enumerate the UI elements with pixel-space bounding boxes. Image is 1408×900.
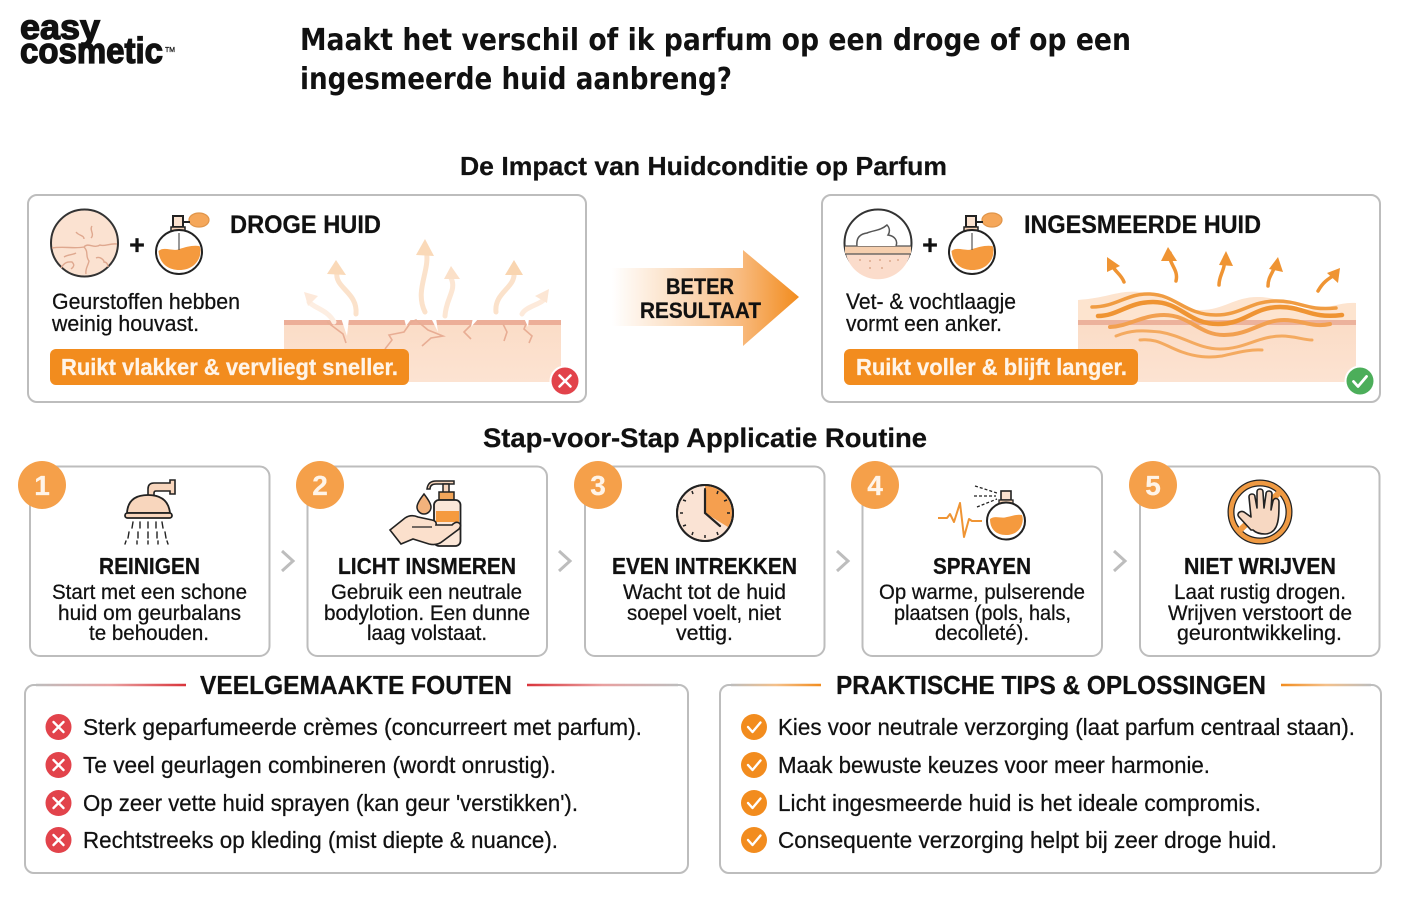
number badge: 2	[312, 470, 328, 501]
tip 1: Kies voor neutrale verzorging (laat parfum centraal staan).	[778, 714, 1355, 740]
logo: easy cosmetic	[20, 8, 175, 71]
logo: easy cosmetic: TM	[165, 47, 175, 54]
step text: plaatsen (pols, hals,	[894, 602, 1071, 625]
step text: huid om geurbalans	[58, 602, 241, 625]
chevron	[559, 551, 570, 571]
heading: impact: De Impact van Huidconditie op Parfum	[460, 151, 947, 181]
result pill: Ruikt vlakker & vervliegt sneller.	[61, 354, 398, 380]
panel: praktische tips	[720, 670, 1381, 873]
tip 2: Maak bewuste keuzes voor meer harmonie.	[778, 752, 1210, 778]
logo: easy cosmetic: cosmetic	[20, 30, 163, 71]
step text: laag volstaat.	[367, 622, 487, 645]
step text: Start met een schone	[52, 581, 247, 604]
step text: Wrijven verstoort de	[1168, 602, 1352, 625]
number badge: 3	[590, 470, 606, 501]
step text: Op warme, pulserende	[879, 581, 1085, 604]
panel heading: PRAKTISCHE TIPS & OPLOSSINGEN	[836, 670, 1266, 700]
arrow: beter resultaat	[612, 250, 799, 346]
logo: easy cosmetic: easy	[20, 8, 101, 47]
number badge: 5	[1145, 470, 1161, 501]
number badge	[296, 461, 344, 509]
step text	[1168, 581, 1352, 645]
chevron	[282, 551, 293, 571]
panel title: INGESMEERDE HUID	[1024, 211, 1261, 239]
step 2: licht insmeren	[296, 461, 547, 656]
result pill	[50, 349, 409, 385]
panel: veelgemaakte fouten	[25, 670, 688, 873]
panel heading: VEELGEMAAKTE FOUTEN	[200, 670, 512, 700]
step 1: reinigen	[18, 461, 270, 656]
icon: cream on skin	[844, 210, 912, 279]
icon: no rubbing hand	[1231, 483, 1289, 541]
step text: Gebruik een neutrale	[331, 581, 522, 604]
step text	[623, 581, 786, 645]
description: Geurstoffen hebben	[52, 289, 240, 314]
tip 3: Licht ingesmeerde huid is het ideale compromis.	[778, 790, 1261, 816]
step title: SPRAYEN	[933, 553, 1031, 579]
panel: droge huid	[28, 195, 586, 402]
result pill: Ruikt voller & blijft langer.	[856, 354, 1127, 380]
step text	[52, 581, 247, 645]
icon: shower	[125, 480, 175, 544]
number badge: 1	[34, 470, 50, 501]
description	[51, 289, 240, 336]
mistake 2: Te veel geurlagen combineren (wordt onrustig).	[83, 752, 556, 778]
step title: REINIGEN	[99, 553, 200, 579]
panel title: DROGE HUID	[230, 211, 381, 239]
mistake 1: Sterk geparfumeerde crèmes (concurreert met parfum).	[83, 714, 642, 740]
title: Maakt het verschil of ik parfum op een droge of op een	[300, 23, 1131, 58]
number badge	[574, 461, 622, 509]
number badge: 4	[867, 470, 883, 501]
chevron	[1114, 551, 1125, 571]
step title: EVEN INTREKKEN	[612, 553, 797, 579]
number badge	[851, 461, 899, 509]
step text: Wacht tot de huid	[623, 581, 786, 604]
plus sign: +	[129, 230, 145, 260]
icon: lotion and hand	[390, 481, 460, 546]
tip 4: Consequente verzorging helpt bij zeer droge huid.	[778, 827, 1277, 853]
mistake 3: Op zeer vette huid sprayen (kan geur 'verstikken').	[83, 790, 578, 816]
chevron	[837, 551, 848, 571]
step text	[879, 581, 1085, 645]
step text: Laat rustig drogen.	[1174, 581, 1346, 604]
description	[846, 289, 1016, 336]
step text: vettig.	[676, 622, 733, 645]
badge: cross	[550, 366, 580, 396]
heading: routine: Stap-voor-Stap Applicatie Routine	[483, 423, 927, 453]
step text: soepel voelt, niet	[627, 602, 781, 625]
plus sign: +	[922, 230, 938, 260]
illustration: hydrated skin with scent waves	[1078, 247, 1356, 382]
arrow: beter resultaat: RESULTAAT	[640, 298, 762, 323]
icon: perfume bottle	[949, 213, 1002, 274]
step text: bodylotion. Een dunne	[324, 602, 530, 625]
arrow: beter resultaat: BETER	[666, 274, 734, 299]
title: ingesmeerde huid aanbreng?	[300, 62, 732, 97]
icon: clock	[677, 485, 733, 541]
description: Vet- & vochtlaagje	[846, 289, 1016, 314]
description: vormt een anker.	[846, 311, 1002, 336]
panel: ingesmeerde huid	[822, 195, 1380, 402]
title	[300, 23, 1131, 97]
illustration: dry skin with escaping scent	[284, 239, 561, 382]
step 3: even intrekken	[574, 461, 824, 656]
step text: geurontwikkeling.	[1177, 622, 1342, 645]
description: weinig houvast.	[51, 311, 199, 336]
icon: spray and pulse	[938, 486, 1025, 540]
step text: te behouden.	[89, 622, 209, 645]
step text: decolleté).	[935, 622, 1029, 645]
mistake 4: Rechtstreeks op kleding (mist diepte & nuance).	[83, 827, 558, 853]
badge: check	[1344, 366, 1376, 396]
number badge	[1129, 461, 1177, 509]
number badge	[18, 461, 66, 509]
step title: NIET WRIJVEN	[1184, 553, 1336, 579]
step 5: niet wrijven	[1129, 461, 1380, 656]
icon: cracked skin	[51, 210, 118, 276]
step text	[324, 581, 530, 645]
icon: perfume bottle	[156, 213, 209, 274]
result pill	[844, 349, 1138, 385]
step title: LICHT INSMEREN	[338, 553, 516, 579]
step 4: sprayen	[851, 461, 1102, 656]
